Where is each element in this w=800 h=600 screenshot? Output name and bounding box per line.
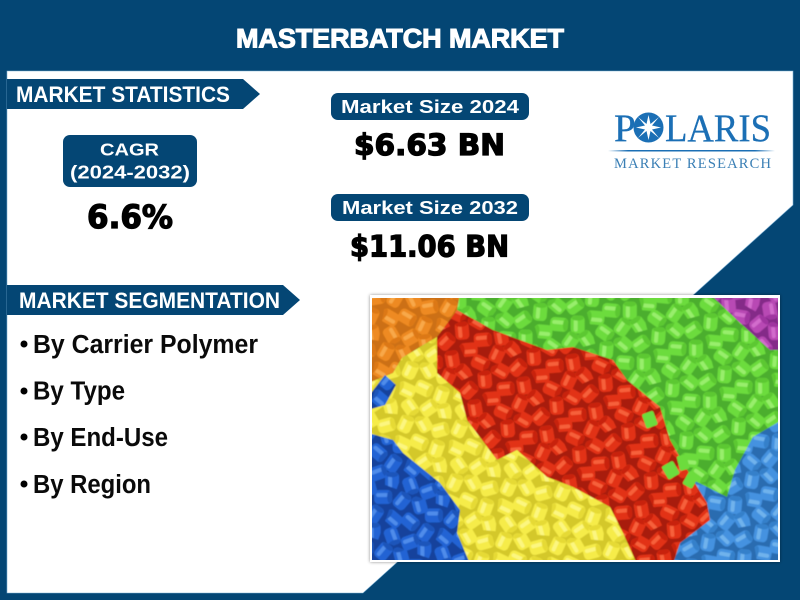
Polaris Market Research logo: LARIS (665, 107, 771, 150)
market size 2024 value: $6.63 BN (354, 128, 505, 162)
CAGR label pill (63, 135, 197, 187)
CAGR stat (63, 135, 197, 236)
market size 2032 label pill: Market Size 2032 (342, 197, 518, 218)
CAGR value: 6.6% (87, 198, 173, 236)
item: by region: By Region (33, 471, 151, 499)
market size 2024 label pill (331, 93, 529, 120)
CAGR label pill: CAGR (100, 140, 159, 160)
icon: star compass (634, 112, 664, 142)
photo: coloured plastic pellets (368, 294, 782, 564)
market size 2024 label pill: Market Size 2024 (341, 96, 520, 117)
stray green pellets (642, 410, 699, 489)
market size 2032 stat (331, 194, 529, 264)
Polaris Market Research logo: MARKET RESEARCH (614, 156, 772, 172)
item: by carrier polymer: By Carrier Polymer (33, 331, 258, 359)
Polaris Market Research logo: P (614, 107, 636, 150)
item: by end-use: By End-Use (33, 424, 168, 452)
Polaris Market Research logo (608, 107, 775, 172)
market statistics heading ribbon: MARKET STATISTICS (16, 82, 230, 107)
Polaris Market Research logo: O (635, 107, 663, 150)
CAGR label pill: (2024-2032) (70, 162, 190, 182)
title: MASTERBATCH MARKET (236, 24, 564, 54)
market segmentation heading ribbon: MARKET SEGMENTATION (19, 288, 280, 313)
market size 2024 stat (331, 93, 529, 162)
segmentation list (20, 331, 258, 499)
market size 2032 value: $11.06 BN (350, 230, 509, 264)
market size 2032 label pill (331, 194, 529, 221)
item: by type: By Type (33, 378, 125, 406)
